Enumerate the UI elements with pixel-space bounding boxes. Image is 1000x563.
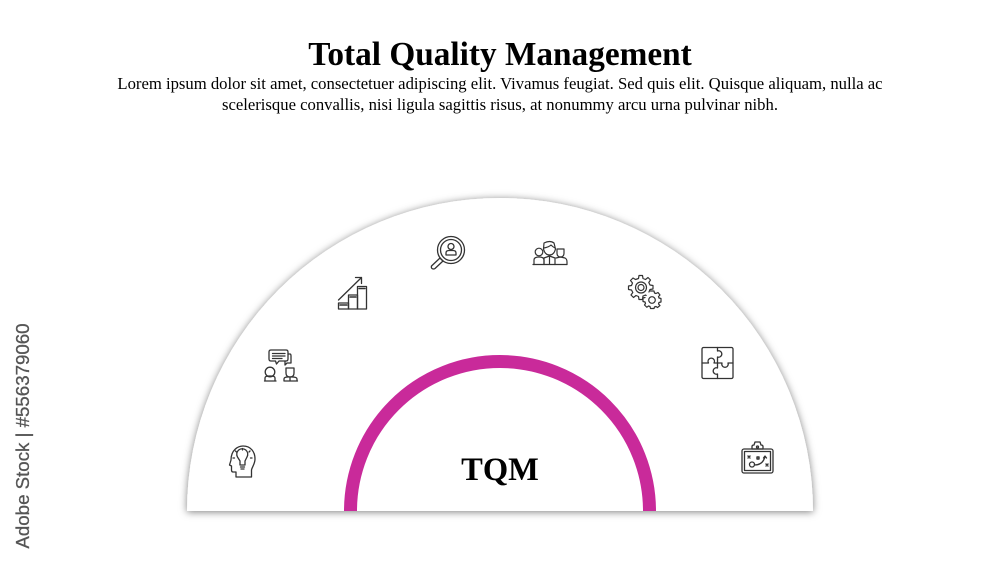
- intro text: [117, 74, 883, 114]
- title: Total Quality Management: [308, 36, 692, 73]
- panel: white semicircle: [187, 198, 813, 511]
- intro text: scelerisque convallis, nisi ligula sagittis risus, at nonummy arcu urna pulvinar nibh.: [222, 94, 778, 114]
- icon: puzzle: [702, 348, 733, 378]
- intro text: Lorem ipsum dolor sit amet, consectetuer adipiscing elit. Vivamus feugiat. Sed quis elit. Quisque aliquam, nulla ac: [117, 74, 883, 93]
- icon: growth bars with arrow: [338, 278, 366, 309]
- icon: head with lightbulb: [230, 446, 255, 477]
- stock watermark id: Adobe Stock | #556379060: [12, 323, 33, 548]
- icon: gears: [628, 276, 661, 308]
- icon: team of three: [533, 242, 567, 264]
- center label: TQM: [461, 452, 539, 488]
- icon: magnifier with person: [431, 236, 464, 269]
- icon: strategy board: [742, 442, 773, 473]
- magenta ring: [350, 361, 650, 511]
- icon: two people talking: [264, 350, 298, 381]
